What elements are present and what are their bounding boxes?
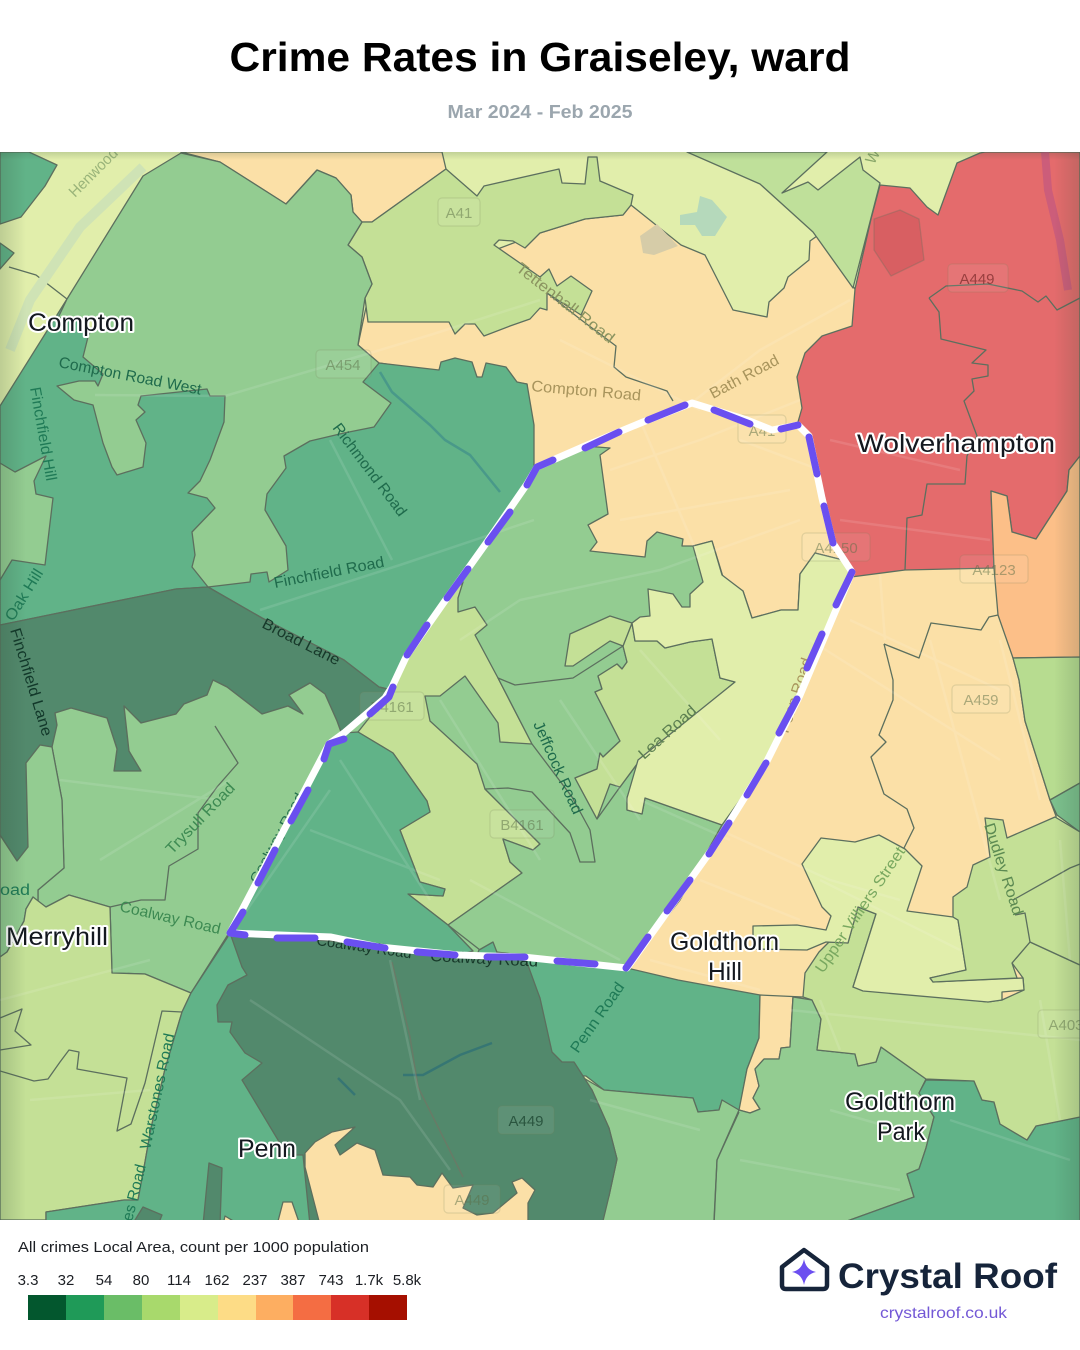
legend scale labels: 237 — [242, 1272, 268, 1289]
website url: crystalroof.co.uk — [880, 1305, 1008, 1322]
road name labels: Finchfield Road — [273, 554, 386, 592]
road number badges: A41 — [749, 423, 775, 440]
legend scale labels: 1.7k — [355, 1272, 384, 1289]
road name labels — [0, 145, 1026, 1223]
canal, water and park features — [10, 152, 1068, 1177]
road number badges — [316, 198, 1080, 1213]
place name labels: Goldthorn — [845, 1088, 955, 1116]
legend scale labels: 32 — [58, 1272, 74, 1289]
road name labels: Richmond Road — [329, 420, 410, 520]
ward boundary: Graiseley — [230, 403, 852, 968]
road name labels: Coalway Road — [118, 898, 222, 938]
place name labels — [6, 309, 1055, 1163]
road name labels: Upper Villiers Street — [812, 843, 909, 976]
place name labels: Wolverhampton — [857, 430, 1055, 458]
place name labels: Penn — [238, 1135, 296, 1163]
road number badges: A459 — [963, 692, 999, 709]
place name labels: Park — [877, 1118, 925, 1146]
road number badges: A449 — [508, 1113, 544, 1130]
legend colour bar — [28, 1295, 407, 1320]
road name labels: Bath Road — [707, 352, 782, 403]
legend scale labels — [18, 1272, 422, 1289]
road name labels: Penn Road — [776, 656, 816, 735]
place name labels: Hill — [708, 958, 742, 986]
map regions inside ward boundary — [229, 446, 852, 968]
road name labels: Broad Lane — [259, 615, 343, 669]
road name labels: Finchfield Hill — [26, 386, 59, 482]
road name labels: oad — [0, 882, 30, 899]
legend scale labels: 3.3 — [18, 1272, 38, 1289]
road name labels: Coalway Road — [430, 948, 539, 971]
road number badges: A4123 — [972, 562, 1016, 579]
road name labels: W — [863, 146, 884, 167]
faint road network — [0, 300, 1080, 1190]
legend scale labels: 162 — [204, 1272, 230, 1289]
legend heading: All crimes Local Area, count per 1000 population — [18, 1239, 369, 1256]
brand name: Crystal Roof — [838, 1257, 1057, 1296]
map regions: crime-rate areas — [0, 152, 1080, 1225]
subtitle: date range: Mar 2024 - Feb 2025 — [448, 102, 632, 122]
road name labels: Finchfield Lane — [6, 626, 55, 738]
road number badges: A449 — [959, 271, 995, 288]
road number badges: A454 — [325, 357, 361, 374]
road name labels: Trysull Road — [163, 780, 239, 858]
road name labels: Compton Road — [531, 378, 642, 405]
road name labels: Compton Road West — [57, 354, 203, 399]
place name labels: Compton — [28, 309, 134, 337]
legend scale labels: 80 — [133, 1272, 149, 1289]
road name labels: Coalway Road — [315, 932, 413, 962]
road name labels: Lea Road — [635, 702, 700, 763]
road name labels: Henwood — [66, 145, 122, 201]
legend scale labels: 54 — [96, 1272, 112, 1289]
road name labels: Tettenhall Road — [513, 260, 618, 347]
place name labels: Merryhill — [6, 923, 108, 951]
road name labels: Oak Hill — [2, 566, 47, 624]
road name labels: Jeffcock Road — [529, 719, 586, 817]
legend scale labels: 5.8k — [393, 1272, 422, 1289]
road name labels: Warstones Road — [137, 1032, 178, 1151]
road number badges: B4161 — [370, 699, 414, 716]
road number badges: A41 — [446, 205, 472, 222]
legend scale labels: 743 — [318, 1272, 344, 1289]
road number badges: A449 — [454, 1192, 490, 1209]
legend scale labels: 387 — [280, 1272, 306, 1289]
road number badges: B4161 — [500, 817, 544, 834]
place name labels: Goldthorn — [670, 928, 779, 956]
road name labels: es Road — [119, 1163, 150, 1223]
icon: Crystal Roof house logo — [782, 1250, 827, 1289]
boundary lines between areas — [0, 267, 1080, 1220]
legend scale labels: 114 — [167, 1272, 191, 1289]
road name labels: Dudley Road — [980, 821, 1026, 918]
road name labels: Coalway Road — [246, 790, 307, 885]
road number badges: A4150 — [814, 540, 858, 557]
title: Crime Rates in Graiseley, ward — [230, 34, 850, 80]
road name labels: Penn Road — [567, 979, 628, 1056]
